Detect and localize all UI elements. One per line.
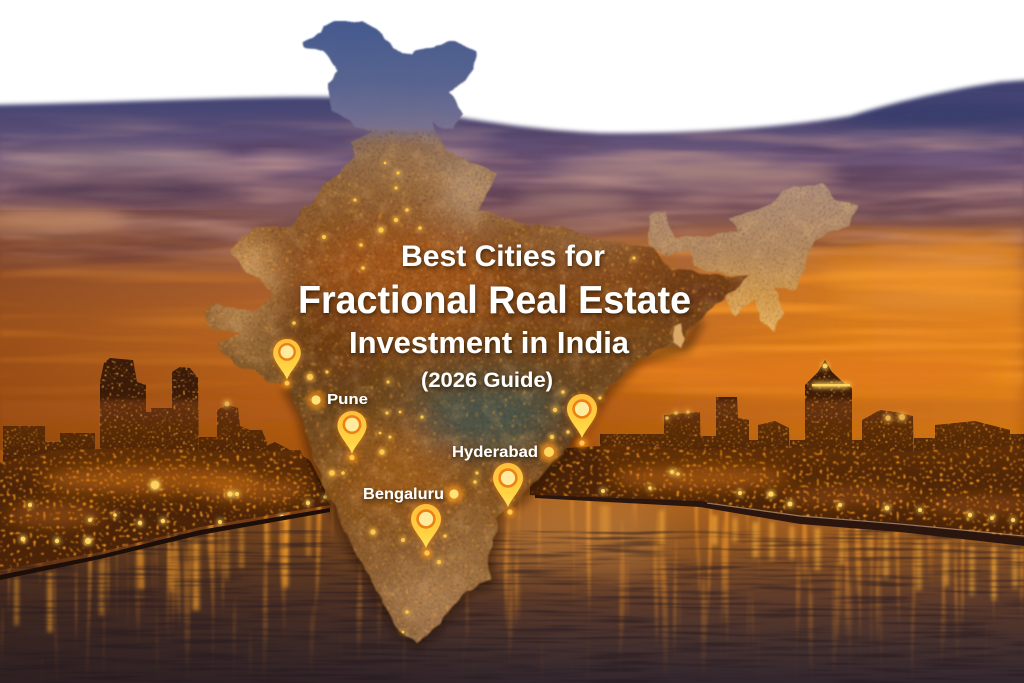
icon: location pin Bengaluru region — [411, 504, 441, 558]
map of India — [190, 10, 865, 650]
shadow around India map — [287, 320, 700, 643]
map: light coastal patch — [672, 322, 686, 348]
haze over left towers — [0, 400, 330, 490]
warm glow in the district — [5, 466, 310, 527]
panel: water — [0, 495, 1024, 683]
low-rise waterfront band — [0, 448, 330, 570]
city label: Hyderabad — [452, 442, 559, 462]
panel: right city skyline — [530, 360, 1024, 546]
reflections of left shore lights — [15, 512, 310, 632]
map: mainland — [190, 10, 770, 650]
heading line: Investment in India: Investment in India — [349, 325, 630, 360]
low-rise waterfront band — [530, 445, 1024, 542]
city label: Bengaluru: Bengaluru — [363, 486, 444, 503]
icon: location pin Pune region — [337, 411, 367, 462]
city label: Pune — [307, 391, 368, 409]
icon: location pin east coast — [567, 394, 597, 448]
map city lights — [292, 162, 636, 633]
waterfront lights — [21, 402, 327, 544]
heading line: Best Cities for: Best Cities for — [401, 240, 605, 273]
promenade seawall — [535, 495, 1024, 546]
heading line: 2026 Guide: (2026 Guide) — [421, 369, 553, 392]
towers — [600, 360, 1024, 480]
warm glow in the district — [610, 466, 1024, 515]
city label: Pune: Pune — [327, 391, 368, 408]
water ripples — [0, 530, 1024, 683]
map: north-east states — [648, 182, 859, 332]
reflections of right shore lights — [600, 505, 1017, 600]
title block — [298, 240, 691, 392]
heading line: Fractional Real Estate: Fractional Real Estate — [298, 279, 691, 322]
icon: location pin Mumbai region — [273, 339, 301, 388]
icon: location pin Hyderabad region — [493, 463, 523, 517]
city label: Hyderabad: Hyderabad — [452, 444, 538, 461]
towers — [3, 358, 325, 500]
tower-top lights — [665, 364, 905, 421]
haze over right towers — [600, 400, 1024, 490]
waterfront lights — [601, 470, 1015, 522]
panel: white sky above the horizon — [0, 0, 1024, 133]
panel: left city skyline — [0, 358, 330, 580]
panel: sunset sky background — [0, 60, 1024, 580]
